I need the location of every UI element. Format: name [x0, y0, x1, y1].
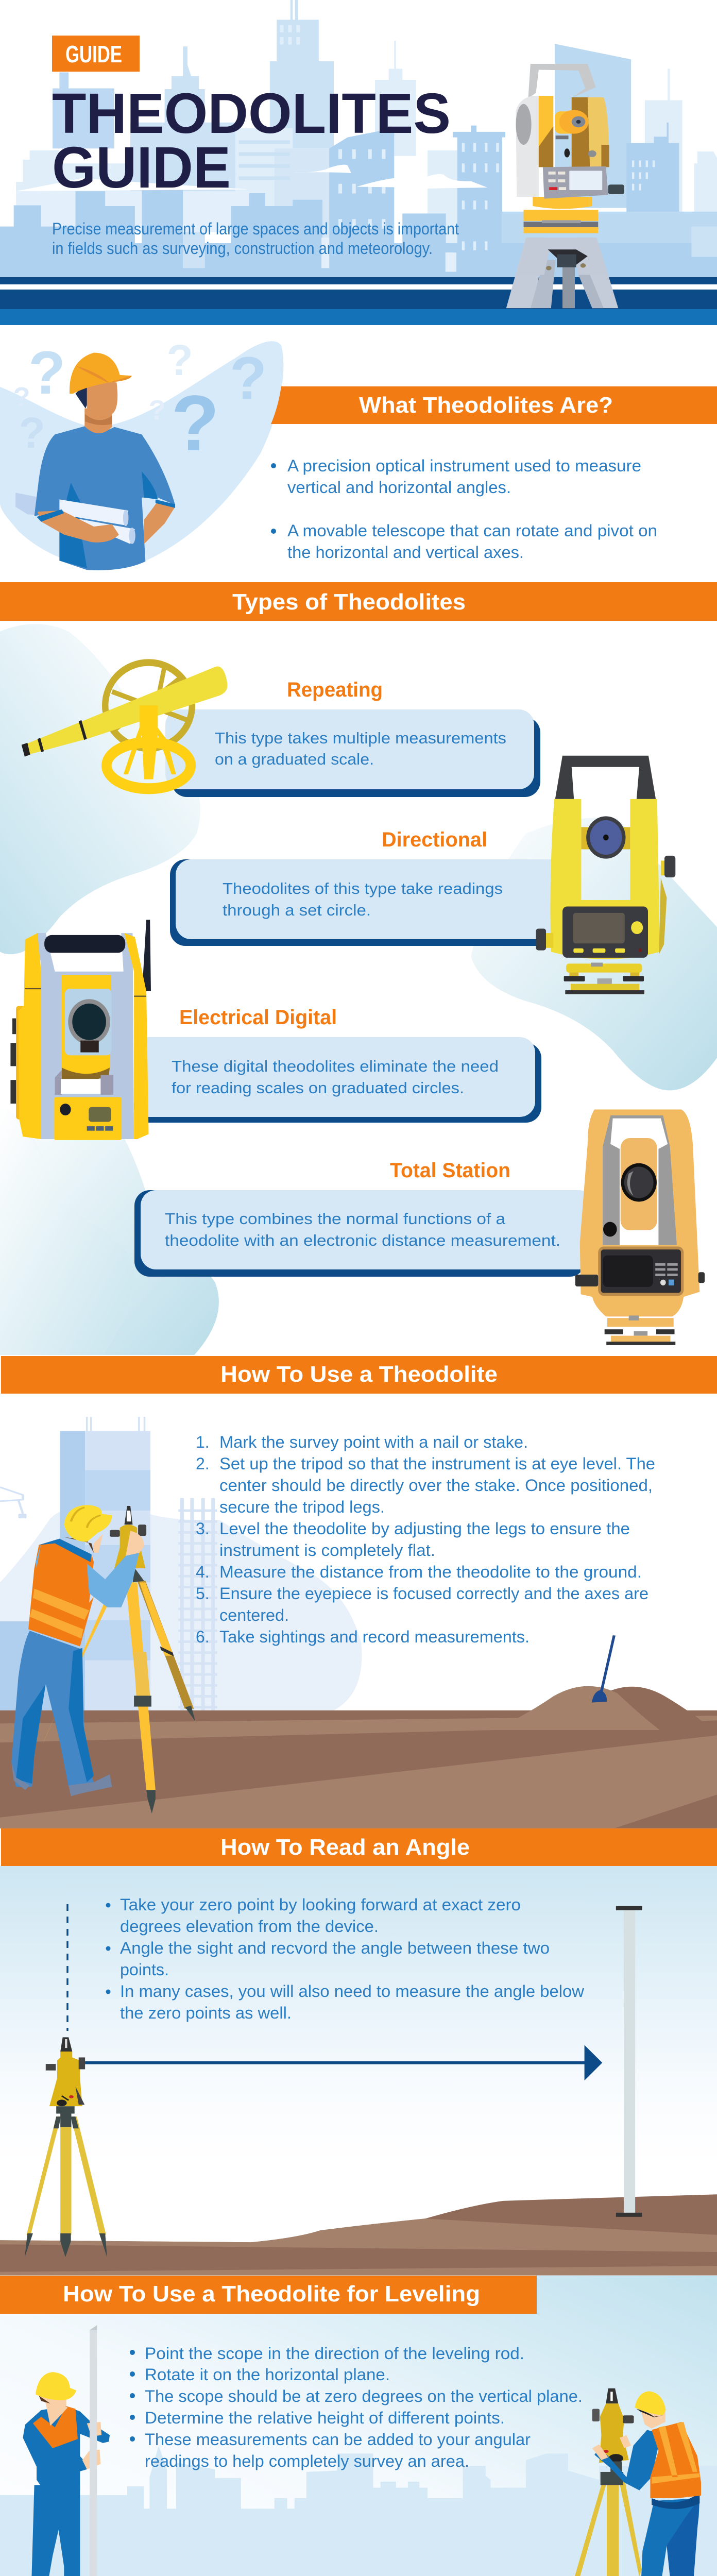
card: electrical digital: [134, 1006, 541, 1123]
text: how to use steps: secure the tripod legs.: [219, 1498, 385, 1516]
text: how to use steps: 4.: [196, 1563, 210, 1581]
subtitle: in fields such as surveying, construction and meteorology.: [52, 239, 433, 258]
text: how to use steps: 1.: [196, 1433, 210, 1451]
text: how to use steps: 3.: [196, 1519, 210, 1538]
banner: leveling: How To Use a Theodolite for Leveling: [63, 2281, 480, 2307]
text: how to use steps: Set up the tripod so that the instrument is at eye level. The: [219, 1454, 655, 1473]
text: angle bullets: Take your zero point by looking forward at exact zero: [120, 1895, 521, 1914]
card: repeating: on a graduated scale.: [215, 750, 374, 768]
card: directional: [170, 828, 567, 946]
title: GUIDE: [52, 135, 231, 200]
banner: how to read an angle: [1, 1828, 717, 1866]
icon: worker with blueprints: [15, 353, 175, 570]
text: definition bullets: [271, 456, 657, 562]
icons: question marks: ?: [19, 409, 45, 457]
icons: question marks: ?: [166, 336, 193, 384]
card: electrical digital: Electrical Digital: [179, 1006, 337, 1029]
text: angle bullets: Angle the sight and recvord the angle between these two: [120, 1939, 550, 1957]
card: directional: Directional: [382, 828, 487, 851]
banner: how to use a theodolite: [1, 1356, 717, 1394]
title: [52, 82, 451, 200]
header: stripes: [0, 277, 717, 325]
text: how to use steps: Measure the distance from the theodolite to the ground.: [219, 1563, 642, 1581]
text: how to use steps: Ensure the eyepiece is focused correctly and the axes are: [219, 1584, 648, 1603]
icons: question marks: ?: [13, 382, 30, 413]
title: THEODOLITES: [52, 82, 451, 145]
text: leveling bullets: The scope should be at zero degrees on the vertical plane.: [145, 2387, 583, 2405]
card: repeating: Repeating: [287, 679, 383, 701]
line: vertical dashed zero reference: [66, 1904, 69, 2031]
card: total station: [134, 1159, 594, 1277]
card: repeating: [165, 679, 540, 797]
card: total station: This type combines the normal functions of a: [165, 1210, 506, 1228]
blob behind worker: [0, 341, 283, 568]
banner: what theodolites are: What Theodolites Are?: [359, 393, 613, 418]
scene: construction background: [0, 1417, 717, 1828]
icons: question marks: ?: [230, 345, 267, 413]
banner: how to read an angle: How To Read an Angle: [220, 1835, 470, 1860]
icon: electrical digital theodolite: [10, 920, 151, 1140]
icon: surveyor with tripod: [11, 1505, 195, 1814]
text: how to use steps: instrument is completely flat.: [219, 1541, 435, 1560]
banner: leveling: [0, 2276, 537, 2314]
text: angle bullets: In many cases, you will also need to measure the angle below: [120, 1982, 585, 2001]
text: definition bullets: A movable telescope that can rotate and pivot on: [287, 521, 657, 540]
text: how to use steps: 2.: [196, 1454, 210, 1473]
card: electrical digital: These digital theodolites eliminate the need: [172, 1057, 499, 1075]
text: definition bullets: A precision optical instrument used to measure: [287, 456, 641, 475]
scene: angle diagram: [0, 1866, 717, 2275]
icons: question marks: ?: [28, 339, 65, 407]
text: how to use steps: center should be directly over the stake. Once positioned,: [219, 1476, 653, 1495]
icons: question marks: ?: [171, 379, 219, 467]
text: how to use steps: Take sightings and record measurements.: [219, 1628, 530, 1646]
text: how to use steps: Mark the survey point with a nail or stake.: [219, 1433, 528, 1451]
icons: question marks: [13, 336, 267, 467]
text: leveling bullets: Point the scope in the direction of the leveling rod.: [145, 2344, 524, 2363]
card: total station: theodolite with an electronic distance measurement.: [165, 1231, 560, 1249]
scene: leveling background: [0, 2276, 717, 2576]
text: definition bullets: the horizontal and vertical axes.: [287, 543, 524, 562]
icons: question marks: ?: [148, 395, 166, 426]
text: how to use steps: 5.: [196, 1584, 210, 1603]
text: how to use steps: 6.: [196, 1628, 210, 1646]
card: directional: Theodolites of this type take readings: [223, 879, 503, 897]
icon: surveyor at tripod, right: [569, 2388, 701, 2576]
text: angle bullets: degrees elevation from the device.: [120, 1917, 379, 1936]
subtitle: Precise measurement of large spaces and objects is important: [52, 219, 459, 238]
card: directional: through a set circle.: [223, 901, 371, 919]
icon: header theodolite on tripod: [506, 64, 624, 308]
text: angle bullets: the zero points as well.: [120, 2004, 292, 2022]
background blobs: types: [0, 624, 717, 1355]
icon: theodolite on tripod, angle: [25, 2037, 107, 2257]
badge: guide: [52, 36, 140, 72]
text: angle bullets: points.: [120, 1960, 169, 1979]
text: leveling bullets: readings to help completely survey an area.: [145, 2452, 469, 2470]
icon: total station: [575, 1110, 705, 1345]
text: leveling bullets: These measurements can be added to your angular: [145, 2430, 531, 2449]
text: definition bullets: vertical and horizontal angles.: [287, 478, 511, 497]
banner: how to use a theodolite: How To Use a Theodolite: [220, 1362, 498, 1387]
text: angle bullets: [106, 1895, 585, 2022]
banner: types of theodolites: [0, 582, 717, 621]
header: skyline background: [0, 0, 717, 277]
text: how to use steps: Level the theodolite by adjusting the legs to ensure the: [219, 1519, 630, 1538]
icon: repeating theodolite: [22, 663, 228, 789]
card: repeating: This type takes multiple measurements: [215, 729, 506, 747]
card: total station: Total Station: [390, 1159, 510, 1182]
text: leveling bullets: Determine the relative height of different points.: [145, 2409, 505, 2427]
arrow: line of sight: [85, 2045, 602, 2080]
card: electrical digital: for reading scales on graduated circles.: [172, 1079, 464, 1097]
icon: worker holding rod: [23, 2325, 110, 2576]
text: how to use steps: centered.: [219, 1606, 289, 1624]
banner: what theodolites are: [271, 386, 717, 424]
icon: directional theodolite: [536, 756, 675, 994]
text: how to use steps: [196, 1433, 655, 1646]
text: leveling bullets: Rotate it on the horizontal plane.: [145, 2365, 390, 2384]
text: leveling bullets: [130, 2344, 583, 2470]
subtitle: [52, 219, 459, 258]
banner: types of theodolites: Types of Theodolites: [232, 589, 466, 615]
badge: guide: GUIDE: [65, 41, 122, 67]
